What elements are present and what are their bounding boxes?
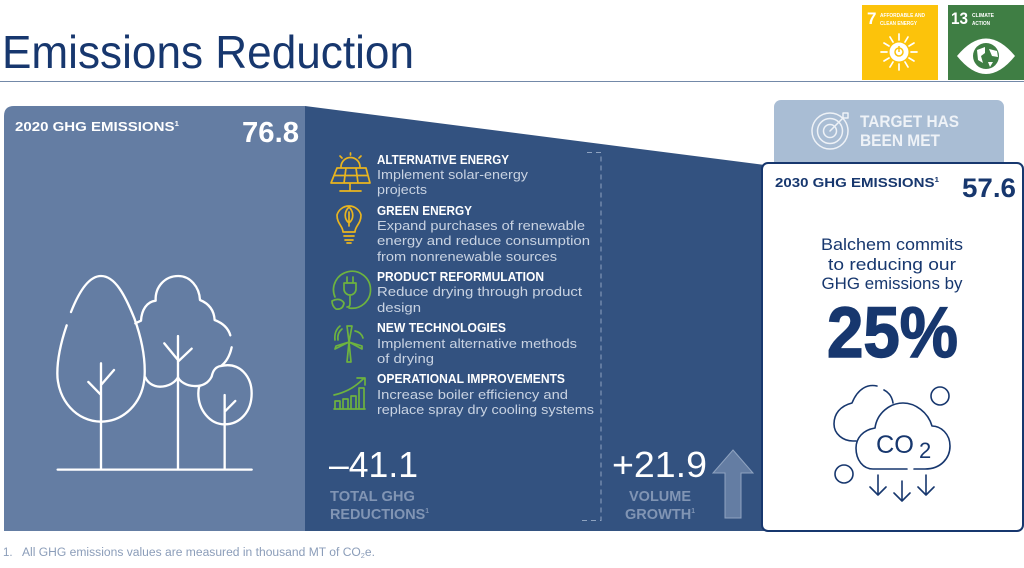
- stat: volume growth: 1: [691, 508, 695, 515]
- item: green energy: [337, 204, 590, 264]
- stat: total GHG reductions: –41.1: [329, 444, 418, 485]
- stat: volume growth: VOLUME: [629, 488, 691, 505]
- commitment text: Balchem commits: [821, 236, 963, 254]
- footnote: All GHG emissions values are measured in thousand MT of CO: [22, 547, 345, 559]
- item: product reformulation: [332, 270, 582, 315]
- icon: SDG 13 climate action: CLIMATE: [972, 13, 995, 19]
- item: product reformulation: Reduce drying through product: [377, 284, 582, 299]
- arrow: volume growth up: [713, 450, 753, 518]
- heading: 2030 GHG emissions: 1: [934, 177, 939, 184]
- stat: total GHG reductions: REDUCTIONS: [330, 506, 429, 523]
- heading: 2020 GHG emissions: 1: [174, 121, 179, 128]
- item: product reformulation: PRODUCT REFORMULATION: [377, 270, 544, 284]
- icon: growth chart: [334, 378, 365, 409]
- item: operational improvements: [334, 372, 595, 417]
- stat: volume growth: GROWTH: [625, 506, 693, 523]
- item: alternative energy: ALTERNATIVE ENERGY: [377, 153, 510, 167]
- icon: SDG 7 affordable and clean energy: CLEAN ENERGY: [880, 21, 917, 27]
- number: 76.8: 76.8: [242, 117, 299, 149]
- item: new technologies: [335, 321, 578, 366]
- number: 57.6: 57.6: [962, 173, 1016, 203]
- icon: target: [812, 113, 848, 149]
- title: Emissions Reduction: [2, 26, 414, 78]
- panel: reduction wedge: [305, 106, 765, 531]
- icon: wind turbine: [335, 326, 363, 362]
- item: operational improvements: replace spray dry cooling systems: [377, 402, 595, 417]
- item: new technologies: of drying: [377, 351, 434, 366]
- stat: total GHG reductions: [329, 444, 429, 523]
- banner: target has been met: [774, 100, 1004, 170]
- stat: volume growth: [612, 444, 707, 523]
- icon: plug and leaf: [332, 271, 371, 309]
- icon: SDG 7 affordable and clean energy: AFFORDABLE AND: [880, 13, 925, 19]
- item: alternative energy: [331, 153, 529, 197]
- icon: trees: [57, 276, 252, 470]
- item: new technologies: NEW TECHNOLOGIES: [377, 321, 506, 335]
- number: 25%: 25%: [827, 294, 958, 373]
- item: green energy: Expand purchases of renewable: [377, 218, 585, 233]
- stat: total GHG reductions: 1: [425, 508, 429, 515]
- commitment text: [821, 236, 963, 293]
- footnote: e.: [365, 547, 375, 559]
- item: product reformulation: design: [377, 300, 421, 315]
- icon: light bulb: [337, 206, 361, 243]
- stat: volume growth: +21.9: [612, 444, 707, 485]
- item: operational improvements: OPERATIONAL IMPROVEMENTS: [377, 372, 565, 386]
- icon: SDG 13 climate action: ACTION: [972, 21, 990, 27]
- item: alternative energy: projects: [377, 182, 428, 197]
- stat: total GHG reductions: TOTAL GHG: [330, 488, 415, 505]
- banner: target has been met: BEEN MET: [860, 132, 940, 150]
- heading: 2030 GHG emissions: 2030 GHG EMISSIONS: [775, 175, 913, 190]
- commitment text: GHG emissions by: [822, 275, 963, 293]
- icon: CO2 cloud: 2: [919, 438, 931, 463]
- item: alternative energy: Implement solar-energy: [377, 167, 529, 182]
- icon: solar panel: [331, 153, 370, 191]
- item: green energy: GREEN ENERGY: [377, 204, 473, 218]
- item: operational improvements: Increase boiler efficiency and: [377, 387, 568, 402]
- icon: SDG 13 climate action: [948, 5, 1024, 80]
- panel: 2030 GHG emissions: [762, 163, 1023, 531]
- icon: SDG 7 affordable and clean energy: 7: [867, 9, 876, 28]
- icon: CO2 cloud: CO: [876, 431, 914, 459]
- dashed bracket: [582, 152, 601, 520]
- icon: SDG 7 affordable and clean energy: [862, 5, 938, 80]
- panel: 2020 GHG emissions: [4, 106, 305, 531]
- heading: 2020 GHG emissions: 2020 GHG EMISSIONS: [15, 119, 153, 134]
- commitment text: to reducing our: [828, 256, 957, 274]
- footnote: 1.: [3, 547, 13, 559]
- icon: SDG 13 climate action: 13: [951, 9, 968, 28]
- item: new technologies: Implement alternative methods: [377, 336, 578, 351]
- banner: target has been met: TARGET HAS: [860, 113, 959, 131]
- item: green energy: from nonrenewable sources: [377, 249, 558, 264]
- footnote: 2: [361, 553, 365, 560]
- item: green energy: energy and reduce consumption: [377, 233, 590, 248]
- icon: CO2 cloud: [834, 386, 950, 501]
